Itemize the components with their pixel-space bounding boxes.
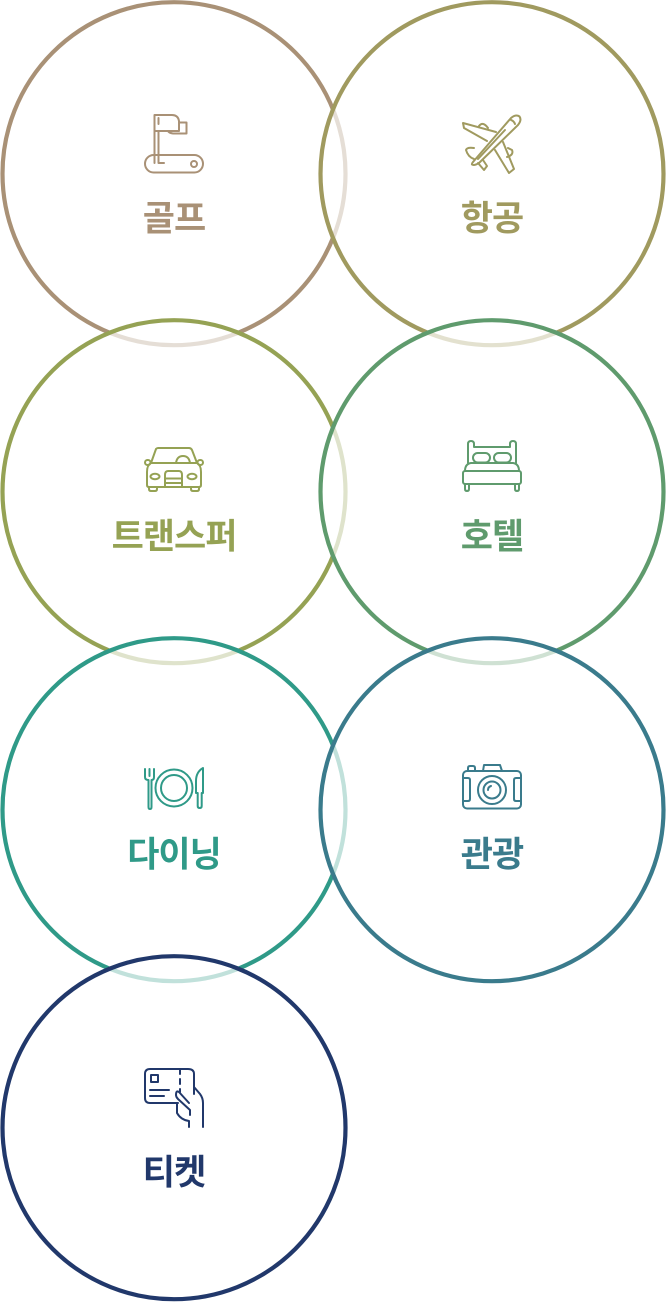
icon: airplane xyxy=(463,116,520,173)
circle: transfer xyxy=(2,320,346,663)
circle: hotel xyxy=(320,320,664,663)
icon: bed xyxy=(463,441,521,491)
circle: golf xyxy=(2,2,346,345)
label: sightseeing: 관광 xyxy=(461,836,524,874)
icon: car xyxy=(145,448,203,491)
label: transfer: 트랜스퍼 xyxy=(112,518,236,556)
label: aviation: 항공 xyxy=(461,200,523,238)
circle: sightseeing xyxy=(320,638,664,981)
label: hotel: 호텔 xyxy=(461,518,523,556)
icon: golf flag xyxy=(145,115,203,172)
circle: aviation xyxy=(320,2,664,345)
circle: dining xyxy=(2,638,346,981)
circle: ticket xyxy=(2,956,346,1299)
label: ticket: 티켓 xyxy=(143,1154,205,1192)
label: golf: 골프 xyxy=(143,200,205,238)
label: dining: 다이닝 xyxy=(127,836,221,874)
icon: camera xyxy=(463,765,521,808)
icon: plate and cutlery xyxy=(145,768,203,809)
icon: ticket in hand xyxy=(145,1069,203,1127)
